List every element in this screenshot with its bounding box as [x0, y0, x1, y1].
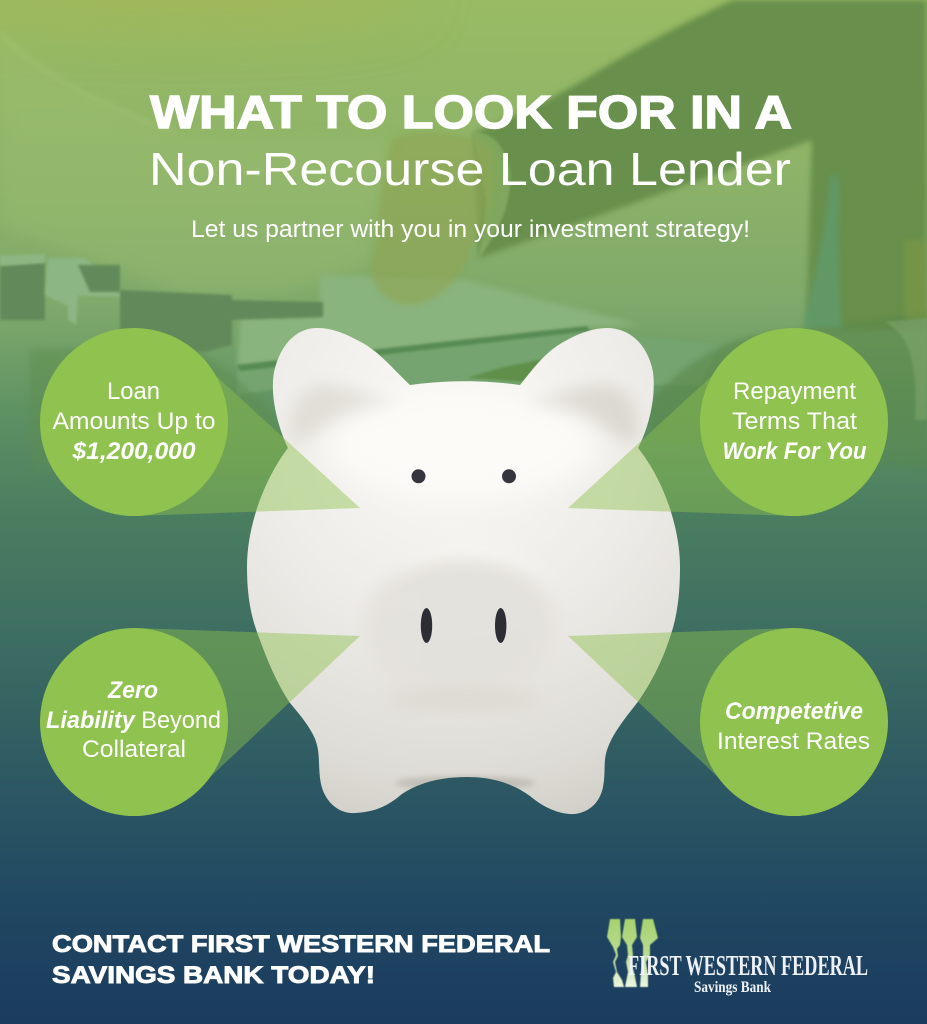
callout: competitive rates: Competetive	[725, 698, 863, 725]
background photo: handshake	[0, 0, 927, 475]
subtitle: Let us partner with you in your investment strategy!	[191, 216, 750, 243]
callout: zero liability	[40, 628, 228, 816]
shirt cuff right	[473, 133, 510, 258]
callout: loan amounts: $1,200,000	[71, 438, 196, 465]
contact call to action: CONTACT FIRST WESTERN FEDERAL	[52, 931, 550, 958]
callout: loan amounts	[40, 328, 228, 516]
callout: loan amounts: Amounts Up to	[52, 408, 216, 435]
callout: zero liability: Collateral	[82, 736, 186, 763]
callout: zero liability: Zero	[107, 677, 158, 704]
title: Non-Recourse Loan Lender	[149, 143, 791, 195]
clasped hands	[371, 132, 494, 305]
title	[149, 86, 792, 195]
callout: repayment terms: Repayment	[733, 378, 856, 405]
callout: competitive rates	[700, 628, 888, 816]
pig chin shadow	[413, 695, 520, 706]
callout: competitive rates: Interest Rates	[717, 728, 870, 755]
connector wedges under pig	[134, 352, 794, 796]
left lower arm	[31, 348, 281, 434]
callout: repayment terms: Terms That	[732, 408, 857, 435]
wedge overlays on pig	[256, 438, 672, 702]
contact call to action	[52, 931, 550, 989]
title: WHAT TO LOOK FOR IN A	[150, 86, 792, 138]
logo icon: green pillars	[607, 919, 658, 987]
pig eyes	[412, 469, 426, 483]
left desk light object	[0, 254, 120, 325]
yellow right edge glow	[905, 240, 927, 320]
left shirt sleeve	[84, 241, 360, 284]
pig nostrils	[421, 608, 432, 643]
callout: zero liability: Liability Beyond	[46, 707, 221, 734]
right lower arm	[648, 312, 927, 470]
pig face highlight	[337, 399, 592, 472]
pig ear shading	[288, 384, 381, 442]
contact call to action: SAVINGS BANK TODAY!	[52, 962, 375, 989]
left desk dark block	[0, 262, 323, 352]
logo: First Western Federal Savings Bank: Savings Bank	[694, 979, 771, 996]
pig snout	[370, 560, 548, 664]
wedge: bottom left	[134, 628, 360, 796]
wedge: top right	[568, 352, 794, 516]
tie stripe	[803, 175, 842, 328]
wedge: bottom right	[568, 628, 794, 796]
table paper	[237, 275, 640, 367]
logo: First Western Federal Savings Bank	[607, 919, 868, 996]
callout: loan amounts: Loan	[107, 378, 160, 405]
wedge: top left	[134, 352, 360, 516]
piggy bank	[247, 328, 680, 814]
callout: repayment terms: Work For You	[722, 438, 867, 465]
right suit arm	[473, 0, 927, 330]
callout: repayment terms	[700, 328, 888, 516]
